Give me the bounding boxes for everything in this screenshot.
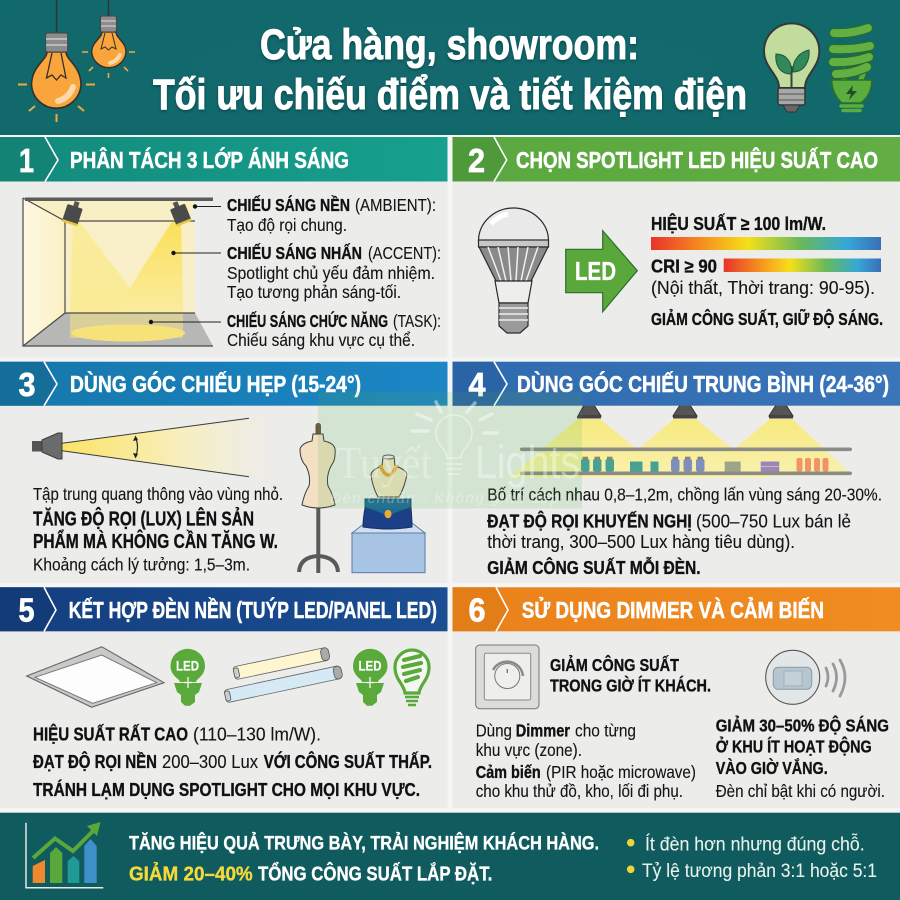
ambient lighting text: TRÁNH LẠM DỤNG SPOTLIGHT CHO MỌI KHU VỰC. bbox=[33, 779, 420, 800]
ambient lighting text: 200–300 Lux bbox=[162, 752, 258, 772]
lighting layer descriptions bbox=[227, 194, 441, 350]
icon: LED bulb badge second bbox=[353, 649, 388, 706]
illustration: tall mannequin bbox=[299, 423, 338, 573]
narrow beam text: Khoảng cách lý tưởng: 1,5–3m. bbox=[33, 555, 250, 575]
key result text: TỔNG CÔNG SUẤT LẮP ĐẶT. bbox=[258, 862, 492, 886]
narrow beam text: TĂNG ĐỘ RỌI (LUX) LÊN SẢN bbox=[33, 507, 254, 531]
dimmer and sensor description: cho từng bbox=[575, 721, 636, 741]
icon: dimmer switch bbox=[476, 645, 539, 709]
ambient lighting text: (110–130 lm/W). bbox=[193, 725, 321, 745]
panel 5: combine with ambient lights bbox=[0, 587, 448, 808]
shelf lighting illustration bbox=[508, 405, 852, 478]
efficiency and CRI specs: (Nội thất, Thời trang: 90-95). bbox=[651, 278, 875, 298]
section 5 heading bbox=[0, 587, 448, 631]
medium beam text: GIẢM CÔNG SUẤT MỖI ĐÈN. bbox=[487, 557, 701, 578]
medium beam text: (500–750 Lux bán lẻ bbox=[696, 511, 851, 531]
section 3 heading: 3 bbox=[18, 366, 36, 403]
lighting layer descriptions: Spotlight chủ yếu đảm nhiệm. bbox=[227, 263, 435, 283]
footer band bbox=[0, 813, 900, 900]
key result text: GIẢM 20–40% bbox=[129, 863, 253, 886]
efficiency and CRI specs: HIỆU SUẤT ≥ 100 lm/W. bbox=[651, 213, 826, 234]
header band bbox=[0, 0, 900, 135]
dimmer and sensor description: Cảm biến bbox=[476, 762, 541, 782]
panel 6: dimmer and sensor bbox=[452, 587, 900, 808]
icon: large hanging bulb bbox=[18, 0, 95, 122]
shelf products bbox=[581, 457, 828, 472]
section 1 heading: 1 bbox=[19, 142, 34, 179]
efficiency and CRI specs bbox=[651, 213, 883, 329]
title bbox=[153, 21, 747, 119]
panel 1: three lighting layers bbox=[0, 137, 448, 358]
section 1 heading: PHÂN TÁCH 3 LỚP ÁNH SÁNG bbox=[70, 146, 349, 173]
watermark bbox=[318, 392, 582, 508]
icon: green leaf bulb bbox=[764, 23, 819, 112]
illustration: necklace bust and handbag on plinth bbox=[352, 455, 425, 573]
sensor savings text bbox=[716, 715, 889, 801]
lighting layer descriptions: Chiếu sáng khu vực cụ thể. bbox=[227, 330, 415, 350]
icon: LED bulb bbox=[478, 208, 548, 333]
lighting layer descriptions: (ACCENT): bbox=[368, 243, 441, 263]
ambient lighting text bbox=[33, 724, 432, 800]
section 1 heading bbox=[0, 137, 448, 182]
sensor savings text: VÀO GIỜ VẮNG. bbox=[716, 757, 828, 778]
panel 4: medium beam angle bbox=[452, 362, 900, 583]
arrow: LED bbox=[566, 231, 637, 312]
lighting layer descriptions: (TASK): bbox=[393, 311, 441, 331]
room illustration with three light layers bbox=[23, 198, 221, 346]
lighting layer descriptions: CHIẾU SÁNG NHẤN bbox=[227, 242, 362, 263]
lighting layer descriptions: CHIẾU SÁNG NỀN bbox=[227, 194, 350, 215]
title: Tối ưu chiếu điểm và tiết kiệm điện bbox=[153, 71, 747, 119]
bullet notes: Tỷ lệ tương phản 3:1 hoặc 5:1 bbox=[642, 861, 877, 882]
icon: LED bulb badge second: LED bbox=[358, 659, 382, 674]
section 3 heading bbox=[0, 362, 448, 406]
sensor savings text: Ở KHU ÍT HOẠT ĐỘNG bbox=[716, 736, 872, 757]
icon: LED bulb badge bbox=[170, 649, 205, 706]
section 6 heading: SỬ DỤNG DIMMER VÀ CẢM BIẾN bbox=[522, 595, 824, 623]
dimmer and sensor description: cho khu thử đồ, kho, lối đi phụ. bbox=[476, 781, 683, 801]
ambient lighting text: ĐẠT ĐỘ RỌI NỀN bbox=[33, 751, 157, 772]
icon: left track spotlight bbox=[62, 199, 84, 226]
dimmer and sensor description: Dùng bbox=[476, 721, 512, 741]
dimmer and sensor description: khu vực (zone). bbox=[476, 740, 582, 760]
watermark: Đèn chuẩn - Không gian đẹp bbox=[330, 490, 560, 507]
diagram: narrow light beam bbox=[32, 414, 285, 482]
icon: green spiral bulb bbox=[832, 28, 872, 110]
panel 2: high efficiency LED spotlight bbox=[452, 137, 900, 358]
dimmer and sensor description: (PIR hoặc microwave) bbox=[546, 762, 696, 782]
narrow beam text: PHẨM MÀ KHÔNG CẦN TĂNG W. bbox=[33, 529, 278, 553]
section 6 heading: 6 bbox=[468, 592, 486, 629]
section 3 heading: DÙNG GÓC CHIẾU HẸP (15-24°) bbox=[70, 370, 361, 397]
dimmer and sensor description bbox=[476, 721, 696, 801]
title: Cửa hàng, showroom: bbox=[260, 21, 639, 69]
icon: right track spotlight bbox=[168, 199, 192, 227]
section 5 heading: KẾT HỢP ĐÈN NỀN (TUÝP LED/PANEL LED) bbox=[69, 596, 437, 623]
section 2 heading: 2 bbox=[468, 142, 485, 179]
bullet notes: Ít đèn hơn nhưng đúng chỗ. bbox=[645, 834, 865, 856]
medium beam text: thời trang, 300–500 Lux hàng tiêu dùng). bbox=[487, 532, 795, 552]
icon: small hanging bulb bbox=[82, 0, 135, 78]
key result text: TĂNG HIỆU QUẢ TRƯNG BÀY, TRẢI NGHIỆM KHÁCH HÀNG. bbox=[129, 832, 599, 854]
section 5 heading: 5 bbox=[18, 592, 34, 629]
icon: motion sensor with waves bbox=[766, 650, 845, 704]
lighting layer descriptions: Tạo độ rọi chung. bbox=[227, 215, 347, 235]
panel 3: narrow beam angle bbox=[0, 362, 448, 583]
icon: square LED panel bbox=[27, 647, 164, 707]
lighting layer descriptions: (AMBIENT): bbox=[355, 195, 436, 215]
dimmer heading text bbox=[550, 654, 711, 696]
medium beam text: ĐẠT ĐỘ RỌI KHUYẾN NGHỊ bbox=[487, 510, 692, 531]
arrow: LED: LED bbox=[575, 256, 616, 286]
dimmer heading text: GIẢM CÔNG SUẤT bbox=[550, 654, 679, 675]
watermark: Tuyết bbox=[336, 437, 432, 488]
icon: LED bulb badge: LED bbox=[176, 659, 199, 674]
dimmer and sensor description: Dimmer bbox=[516, 721, 570, 741]
dimmer heading text: TRONG GIỜ ÍT KHÁCH. bbox=[550, 675, 711, 696]
ambient lighting text: HIỆU SUẤT RẤT CAO bbox=[33, 724, 188, 745]
watermark: Lights bbox=[475, 436, 580, 488]
section 4 heading bbox=[452, 362, 900, 406]
bullet notes bbox=[627, 834, 877, 882]
icon: LED tubes bbox=[224, 647, 343, 703]
narrow beam text: Tập trung quang thông vào vùng nhỏ. bbox=[33, 484, 283, 504]
narrow beam text bbox=[33, 484, 283, 575]
medium beam text bbox=[487, 485, 882, 578]
section 2 heading bbox=[452, 137, 900, 182]
key result text bbox=[129, 832, 599, 886]
lighting layer descriptions: CHIẾU SÁNG CHỨC NĂNG bbox=[227, 310, 388, 331]
lighting layer descriptions: Tạo tương phản sáng-tối. bbox=[227, 282, 401, 302]
section 6 heading bbox=[452, 587, 900, 631]
icon: growth chart bbox=[26, 822, 103, 888]
ambient lighting text: VỚI CÔNG SUẤT THẤP. bbox=[264, 751, 432, 772]
icon: energy saving bulb outline bbox=[395, 650, 429, 705]
efficiency and CRI specs: CRI ≥ 90 bbox=[651, 256, 717, 276]
section 4 heading: 4 bbox=[468, 366, 486, 403]
